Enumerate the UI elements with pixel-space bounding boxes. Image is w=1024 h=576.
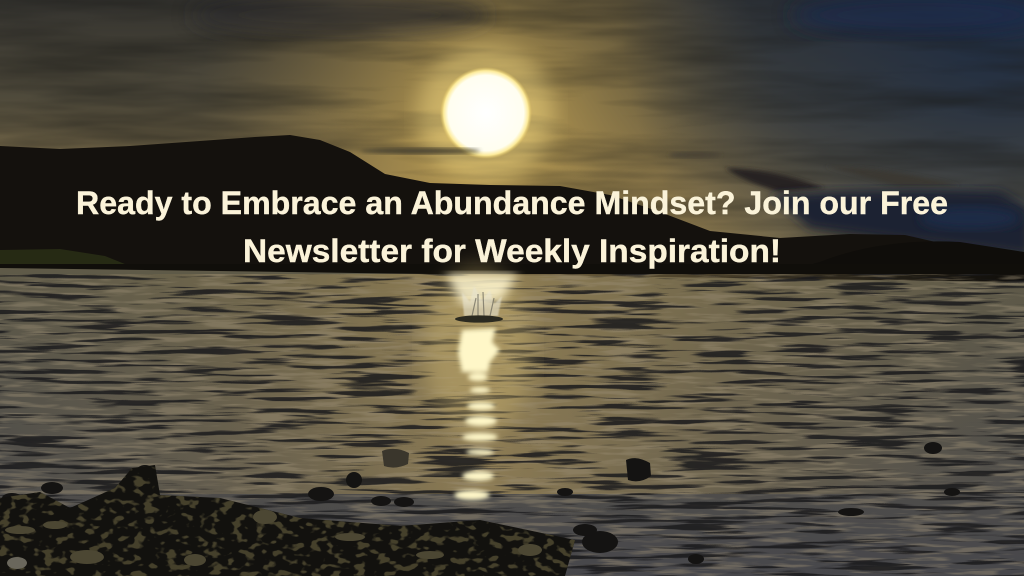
splash on the water	[455, 286, 503, 323]
headline: Newsletter for Weekly Inspiration!	[243, 233, 781, 269]
sun reflection on water	[423, 265, 533, 500]
headline	[76, 185, 948, 269]
mountain silhouette	[0, 135, 1024, 282]
lake	[0, 268, 1024, 576]
sun	[418, 45, 554, 181]
dark clouds on the horizon	[360, 148, 1024, 255]
headline: Ready to Embrace an Abundance Mindset? Join our Free	[76, 185, 948, 221]
far shoreline	[0, 241, 1024, 282]
foreground lone stones	[2, 442, 960, 564]
sky background	[0, 0, 1024, 280]
pebbles on the shore	[0, 460, 600, 576]
